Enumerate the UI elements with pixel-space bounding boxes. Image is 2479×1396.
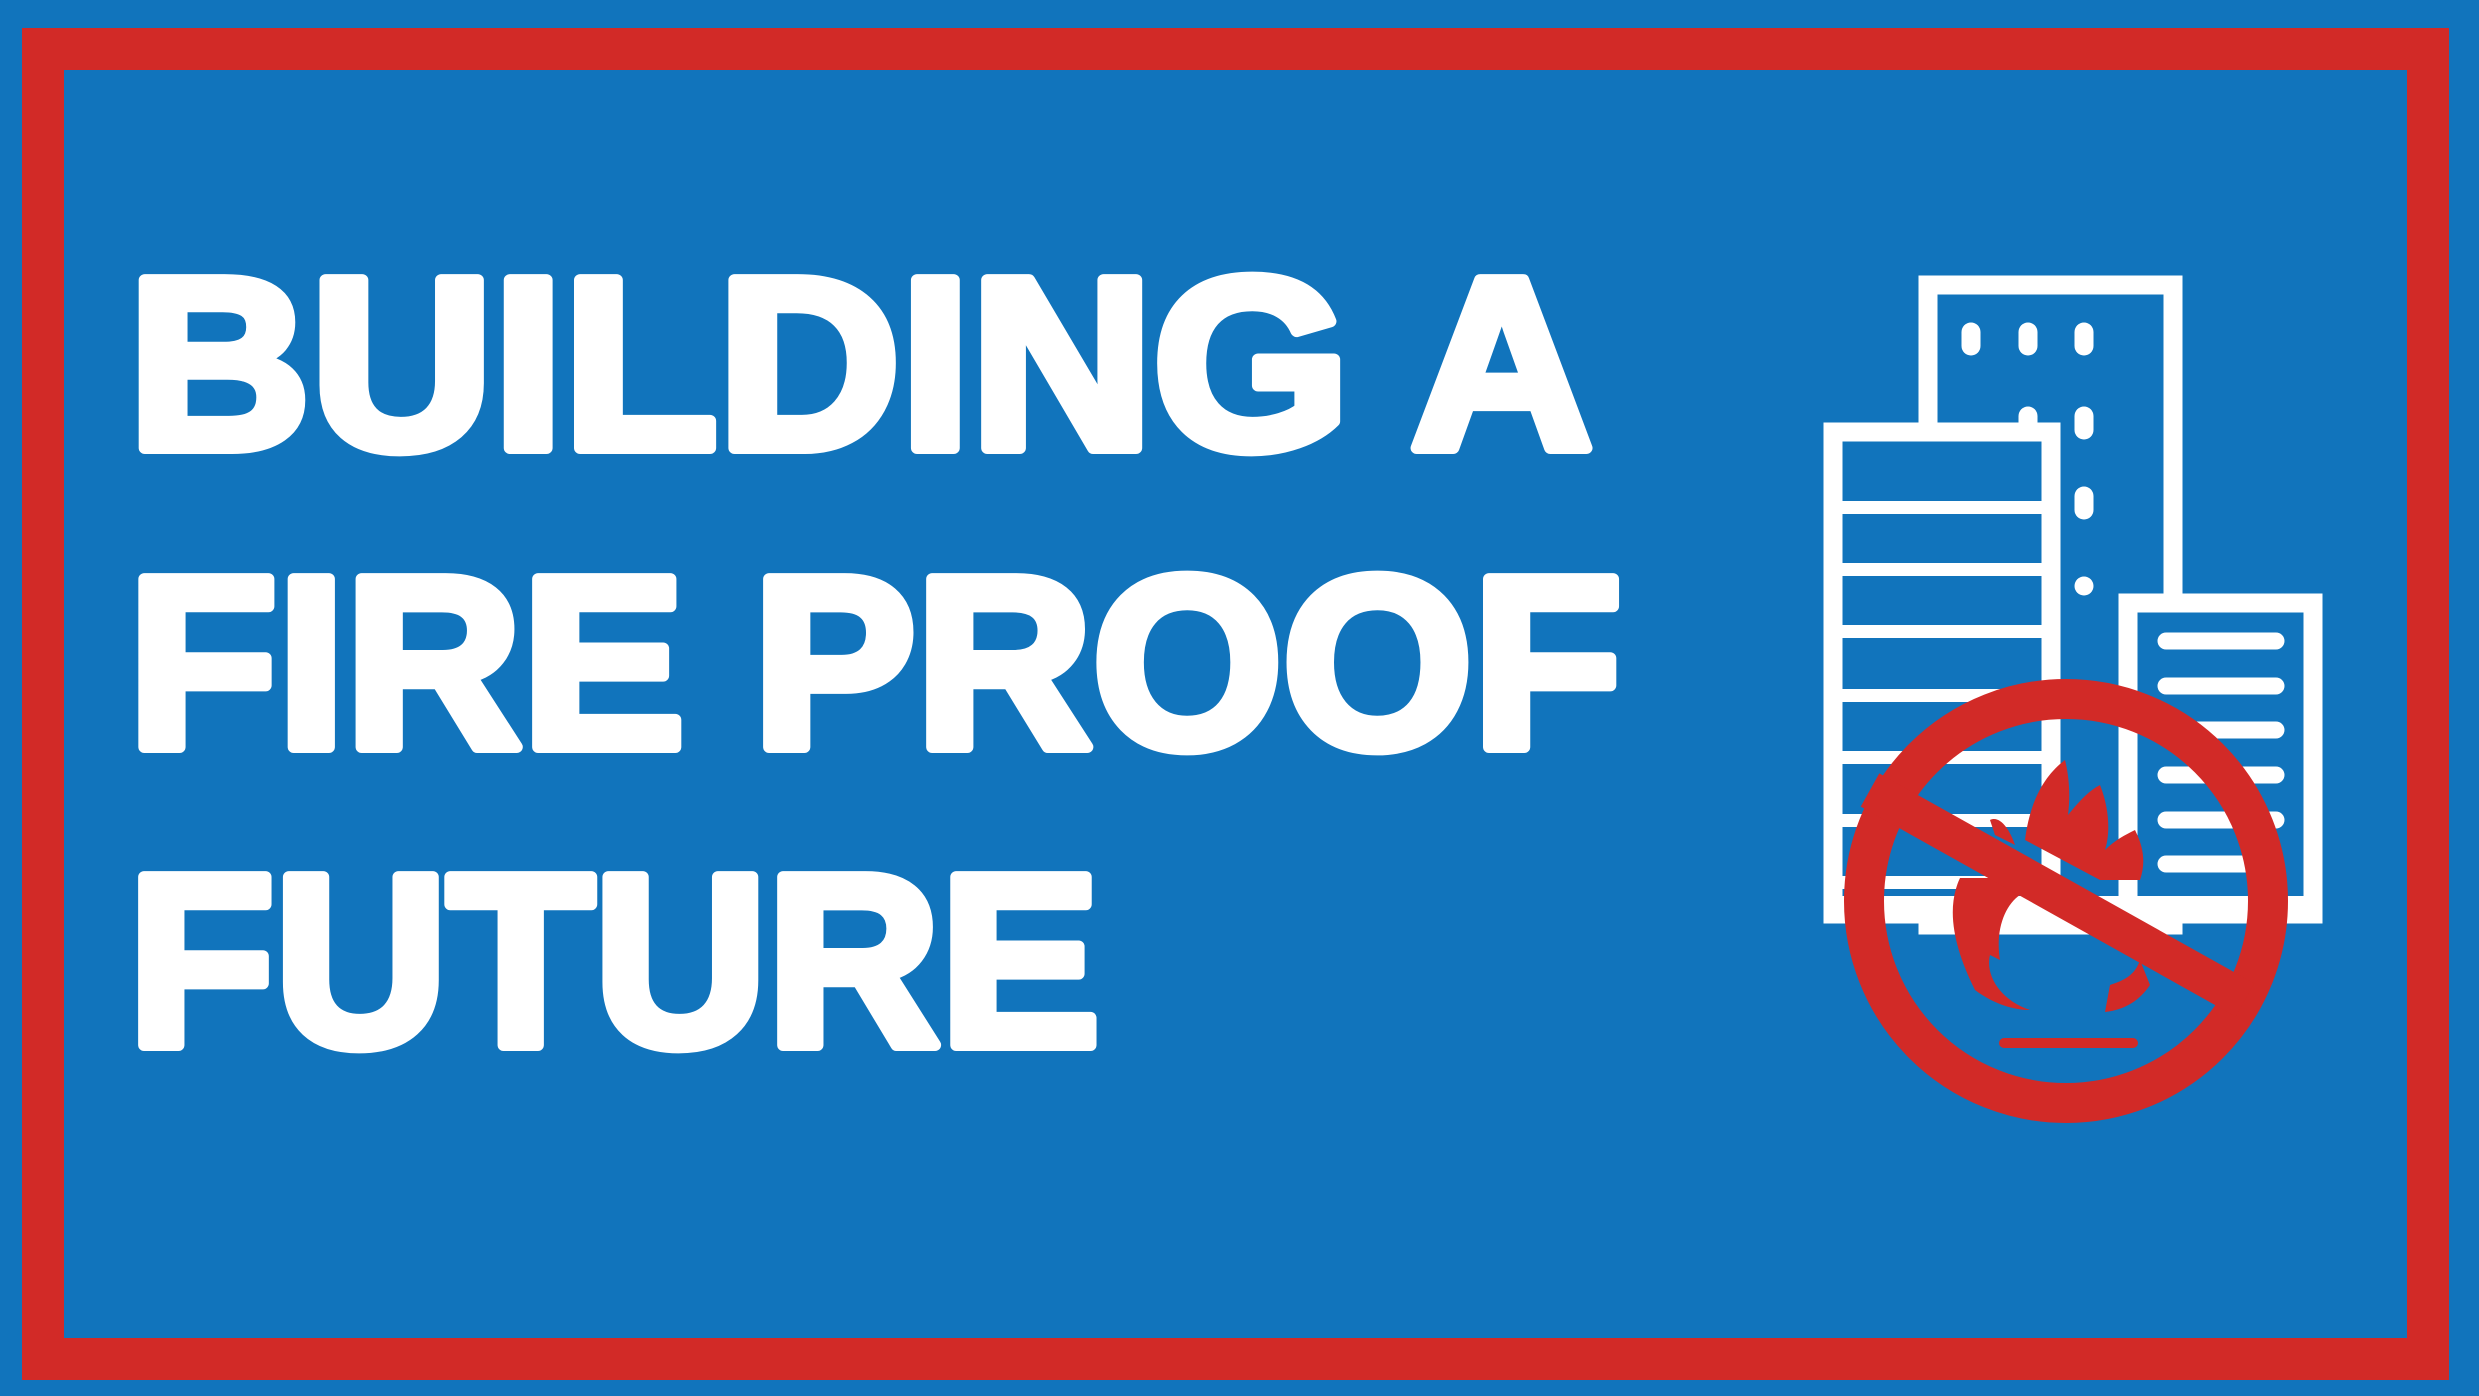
- title: BUILDING A: [128, 227, 1593, 500]
- title: [128, 227, 1622, 1097]
- icon: buildings with no-fire sign: [1833, 285, 2320, 925]
- no sign circle: [1864, 699, 2268, 1103]
- diagonal slash: [1870, 790, 2245, 1000]
- left building: [1833, 432, 2051, 914]
- tall building: [1928, 285, 2173, 925]
- title: FUTURE: [128, 824, 1100, 1097]
- right building: [2128, 603, 2313, 914]
- windows tall building: [1971, 332, 2084, 755]
- flame base bar: [2004, 1038, 2133, 1048]
- title: FIRE PROOF: [128, 526, 1622, 799]
- flame: [1953, 760, 2143, 1010]
